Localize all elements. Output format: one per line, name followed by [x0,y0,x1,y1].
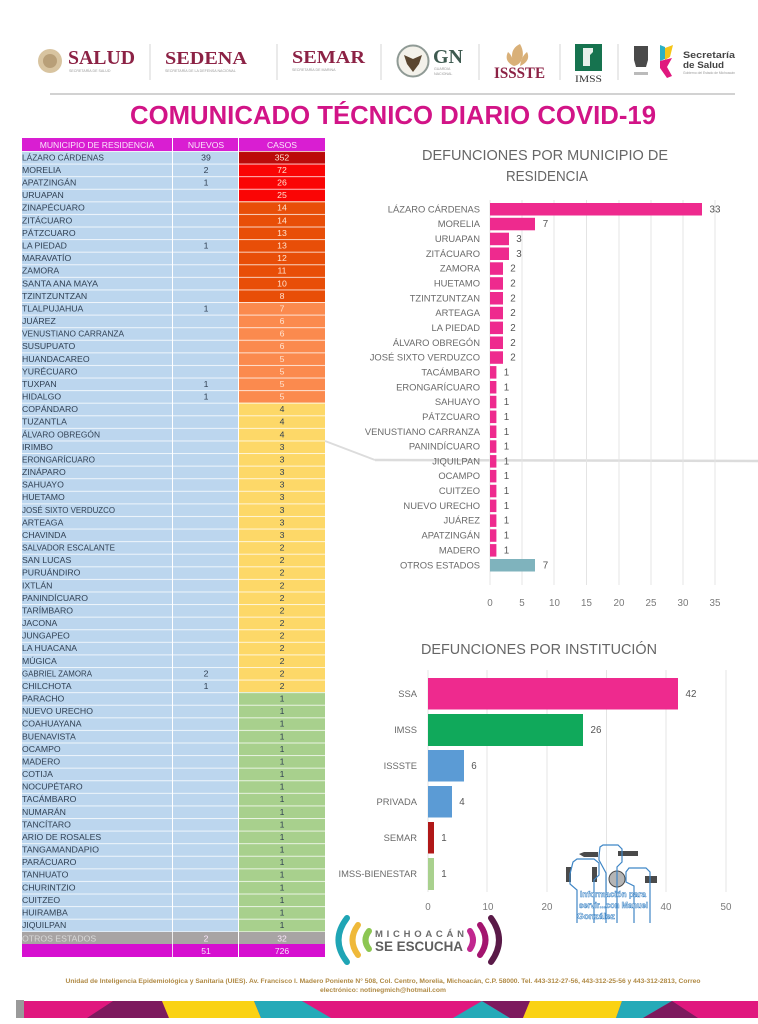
x axis ticks [487,598,721,609]
column: total cases: 3 [280,505,285,515]
value labels: 2 [510,308,516,319]
watermark: raised fists with pencil, phone and microphone [566,845,657,923]
column: municipality names: BUENAVISTA [22,731,76,741]
logo: Semar: SECRETARÍA DE MARINA [292,68,336,72]
logo: IMSS: IMSS [575,75,602,85]
header: institutional logos [38,44,736,85]
column: municipality names: SAHUAYO [22,480,64,490]
column: municipality names: NUMARÁN [22,807,66,817]
category labels: ISSSTE [384,760,417,771]
category labels: URUAPAN [435,233,480,244]
column: municipality names: TLALPUJAHUA [22,303,84,313]
value labels: 26 [591,725,602,736]
category labels: ARTEAGA [435,307,481,318]
column: total cases: 5 [280,392,285,402]
category labels: ERONGARÍCUARO [396,381,480,392]
column: total cases: 4 [280,429,285,439]
logo: Guardia Nacional: GN [433,46,464,68]
column: new cases: 39 [201,152,211,162]
bar chart: deaths by institution [339,670,732,913]
category labels: TZINTZUNTZAN [410,292,480,303]
column: municipality names: MORELIA [22,165,61,175]
column: new cases: 2 [204,934,209,944]
column: total cases: 1 [280,694,285,704]
column: municipality names: TACÁMBARO [22,794,77,804]
column: total cases: 1 [280,819,285,829]
column: total cases: 1 [280,845,285,855]
column: total cases: 5 [280,366,285,376]
column: total cases: 2 [280,580,285,590]
column: new cases [201,152,211,956]
x axis ticks [425,902,732,913]
value labels: 1 [504,545,509,556]
column: new cases: 1 [204,303,209,313]
column: municipality names: JIQUILPAN [22,920,66,930]
column: total cases: 6 [280,316,285,326]
column: total cases: 1 [280,756,285,766]
category labels: OCAMPO [438,470,480,481]
column: total cases: 2 [280,656,285,666]
value labels: 1 [504,427,509,438]
category labels: IMSS [394,724,417,735]
x axis ticks: 25 [646,598,657,609]
column: municipality names: LÁZARO CÁRDENAS [22,152,104,162]
column: total cases: 2 [280,542,285,552]
column: total cases: 13 [277,228,287,238]
footer decorative stripe [16,1000,758,1018]
column: municipality names: JACONA [22,618,57,628]
x axis ticks: 20 [542,902,553,913]
column: total cases: 2 [280,681,285,691]
table cell backgrounds [22,138,325,957]
category labels: PRIVADA [377,796,418,807]
column: total cases: 12 [277,253,287,263]
logo: Sedena: SEDENA [165,48,247,68]
value labels: 3 [516,234,522,245]
column: total cases: 1 [280,769,285,779]
column: municipality names: ZINÁPARO [22,467,66,477]
category labels [365,203,481,570]
logo: Michoacán se escucha: MICHOACÁN [375,929,464,940]
column: new cases: 1 [204,240,209,250]
table header: CASOS [267,140,297,150]
column: municipality names: ERONGARÍCUARO [22,454,95,464]
category labels: PÁTZCUARO [422,411,480,422]
column: municipality names: ÁLVARO OBREGÓN [22,429,100,439]
logo: Secretaría de Salud Michoacán: Secretaría [683,50,736,61]
value labels: 2 [510,278,516,290]
column: total cases: 3 [280,517,285,527]
logo: Michoacán se escucha [338,918,499,962]
x axis ticks: 0 [425,902,431,913]
column: new cases: 1 [204,379,209,389]
value labels [504,204,721,571]
logo: Guardia Nacional: GUARDIA [434,67,451,71]
column: total cases: 1 [280,719,285,729]
column: municipality names: GABRIEL ZAMORA [22,668,92,678]
category labels [339,688,418,879]
watermark: raised fists with pencil, phone and microphone: Información para [580,890,647,899]
column: municipality names: TANGAMANDAPIO [22,845,99,855]
column: total cases: 1 [280,744,285,754]
logo: Salud: SECRETARÍA DE SALUD [69,69,111,73]
column: total cases: 3 [280,454,285,464]
column: total cases: 5 [280,354,285,364]
column: total cases: 5 [280,379,285,389]
column: total cases: 2 [280,631,285,641]
column: municipality names: VENUSTIANO CARRANZA [22,329,124,339]
footer contact text: Unidad de Inteligencia Epidemiológica y Sanitaria (UIES). Av. Francisco I. Madero Poniente N° 508, Col. Centro, Morelia, Michoacán, C.P. 58000. Tel. 443-312-27-56, 443-312-25-56 y 443-312-2813, Correo [66,978,701,985]
column: total cases: 32 [277,934,287,944]
column: total cases: 2 [280,555,285,565]
column: municipality names: NUEVO URECHO [22,706,93,716]
column: municipality names: PANINDÍCUARO [22,593,88,603]
column: total cases: 1 [280,882,285,892]
column: municipality names: MADERO [22,756,60,766]
column: total cases: 7 [280,303,285,313]
column: municipality names: LA PIEDAD [22,240,67,250]
x axis ticks: 50 [721,902,732,913]
value labels: 1 [504,412,509,423]
value labels: 1 [504,382,509,393]
value labels: 1 [441,833,447,844]
bar chart: deaths by municipality [365,200,721,609]
column: municipality names: CUITZEO [22,895,60,905]
logo: Sedena [165,48,247,73]
value labels: 1 [504,486,509,497]
column: municipality names: IRIMBO [22,442,53,452]
column: total cases: 3 [280,480,285,490]
column: total cases: 4 [280,417,285,427]
watermark: raised fists with pencil, phone and microphone: González [577,912,615,921]
column: total cases: 2 [280,568,285,578]
category labels: VENUSTIANO CARRANZA [365,426,481,437]
category labels: HUETAMO [434,278,480,288]
column: total cases: 1 [280,908,285,918]
logo: Salud: SALUD [68,48,135,69]
column: total cases: 1 [280,782,285,792]
x axis ticks: 15 [581,598,592,609]
chart heading: deaths by municipality: DEFUNCIONES POR MUNICIPIO DE [422,148,668,164]
column: total cases: 1 [280,920,285,930]
column: total cases: 2 [280,618,285,628]
logo: Semar [292,47,365,72]
category labels: PANINDÍCUARO [409,441,480,452]
column: municipality names: MÚGICA [22,656,57,666]
chart heading: deaths by institution: DEFUNCIONES POR INSTITUCIÓN [421,641,657,658]
column: total cases: 1 [280,807,285,817]
column: new cases: 1 [204,681,209,691]
column: total cases: 4 [280,404,285,414]
column: municipality names: APATZINGÁN [22,178,76,188]
value labels: 2 [510,264,516,275]
column: new cases: 2 [204,668,209,678]
column: municipality names: SANTA ANA MAYA [22,278,98,288]
category labels: MADERO [439,544,480,555]
column: municipality names: HUIRAMBA [22,908,68,918]
value labels: 1 [504,456,509,467]
column: municipality names: ZITÁCUARO [22,215,72,225]
logo: Michoacán se escucha: SE ESCUCHA [375,938,463,954]
column: municipality names: PARACHO [22,694,65,704]
column: total cases: 1 [280,832,285,842]
x axis ticks: 5 [519,598,525,609]
column: total cases: 11 [277,266,287,276]
column: total cases: 2 [280,668,285,678]
value labels: 1 [504,442,509,453]
column: total cases: 25 [277,190,287,200]
value labels: 1 [504,531,509,542]
column: total cases: 72 [277,165,287,175]
value labels: 33 [710,204,721,215]
watermark: raised fists with pencil, phone and microphone: servir...con Manuel [579,901,648,910]
column: total cases: 10 [277,278,287,288]
column: total cases: 1 [280,870,285,880]
column: municipality names [22,152,124,943]
column: municipality names: ARIO DE ROSALES [22,832,101,842]
category labels: JOSÉ SIXTO VERDUZCO [370,352,480,363]
column: total cases: 13 [277,240,287,250]
category labels: JUÁREZ [444,515,480,526]
column: total cases: 352 [275,152,289,162]
category labels: APATZINGÁN [421,530,480,541]
value labels: 2 [510,338,516,349]
logo: ISSSTE: ISSSTE [494,65,545,82]
column: total cases: 2 [280,606,285,616]
column: municipality names: COTIJA [22,769,53,779]
column: total cases: 26 [277,178,287,188]
footer contact text: electrónico: notinegmich@hotmail.com [320,987,447,994]
column: municipality names: ZINAPÉCUARO [22,203,85,213]
column: municipality names: LA HUACANA [22,643,77,653]
column: new cases: 1 [204,392,209,402]
bars [490,203,702,572]
column: municipality names: JUÁREZ [22,316,56,326]
value labels [441,689,696,880]
column: total cases: 1 [280,857,285,867]
category labels: JIQUILPAN [432,455,480,466]
column: municipality names: TUXPAN [22,379,57,389]
column: total cases: 1 [280,794,285,804]
column: municipality names: SUSUPUATO [22,341,76,351]
bars [428,678,678,890]
value labels: 1 [504,367,509,378]
column: municipality names: CHILCHOTA [22,681,72,691]
column: municipality names: TANCÍTARO [22,819,71,829]
category labels: IMSS-BIENESTAR [339,868,417,879]
logo: Sedena: SECRETARÍA DE LA DEFENSA NACIONAL [165,69,236,73]
category labels: LÁZARO CÁRDENAS [388,203,480,214]
value labels: 7 [543,219,548,230]
logo: IMSS [575,44,602,85]
value labels: 6 [471,761,477,772]
column: municipality names: JOSÉ SIXTO VERDUZCO [22,505,115,515]
category labels: LA PIEDAD [432,322,480,333]
column: total cases: 14 [277,215,287,225]
column: municipality names: YURÉCUARO [22,366,78,376]
logo: ISSSTE [494,44,545,82]
footer contact text [66,978,701,994]
category labels: MORELIA [438,218,481,229]
x axis ticks: 10 [549,598,560,609]
logo: Secretaría de Salud Michoacán: de Salud [683,60,724,71]
logo: Guardia Nacional: NACIONAL [434,72,452,76]
value labels: 1 [504,397,509,408]
column: municipality names: PARÁCUARO [22,857,77,867]
category labels: SSA [398,688,418,699]
column: municipality names: OTROS ESTADOS [22,934,96,944]
logo: Guardia Nacional [398,46,464,76]
value labels: 1 [441,869,447,880]
column: total cases: 3 [280,492,285,502]
value labels: 1 [504,501,509,512]
column: total cases: 3 [280,442,285,452]
value labels: 7 [543,560,548,571]
logo: Secretaría de Salud Michoacán [660,45,736,78]
chart heading: deaths by municipality [422,148,668,185]
category labels: TACÁMBARO [421,366,480,377]
column: total cases: 6 [280,341,285,351]
table header [22,138,325,151]
column: municipality names: COAHUAYANA [22,719,82,729]
table header: MUNICIPIO DE RESIDENCIA [40,140,155,150]
column: municipality names: HIDALGO [22,392,61,402]
column: municipality names: TANHUATO [22,870,69,880]
value labels: 2 [510,323,516,334]
column: municipality names: OCAMPO [22,744,61,754]
column: municipality names: ARTEAGA [22,517,64,527]
column: municipality names: NOCUPÉTARO [22,782,83,792]
title: COMUNICADO TÉCNICO DIARIO COVID-19 [130,100,656,130]
x axis ticks: 20 [614,598,625,609]
x axis ticks: 40 [661,902,672,913]
column: total cases: 14 [277,203,287,213]
column: total cases [275,152,289,956]
column: total cases: 8 [280,291,285,301]
column: municipality names: SALVADOR ESCALANTE [22,542,115,552]
category labels: ZAMORA [440,263,481,274]
column: municipality names: HUETAMO [22,492,65,502]
column: total cases: 6 [280,329,285,339]
column: total cases: 3 [280,530,285,540]
chart heading: deaths by municipality: RESIDENCIA [506,169,588,185]
value labels: 1 [504,516,509,527]
table: cases by municipality [22,138,325,957]
column: municipality names: TZINTZUNTZAN [22,291,87,301]
column: total cases: 1 [280,706,285,716]
column: total cases: 1 [280,731,285,741]
x axis ticks: 0 [487,598,493,609]
logo: Salud [38,48,135,73]
value labels: 1 [504,471,509,482]
value labels: 42 [686,689,696,700]
column: total cases: 3 [280,467,285,477]
column: municipality names: CHAVINDA [22,530,66,540]
column: municipality names: PÁTZCUARO [22,228,76,238]
logo: Secretaría de Salud Michoacán: Gobierno del Estado de Michoacán [683,71,735,75]
category labels: SAHUAYO [435,396,480,407]
column: municipality names: PURUÁNDIRO [22,568,81,578]
column: municipality names: HUANDACAREO [22,354,90,364]
category labels: ÁLVARO OBREGÓN [393,337,480,348]
category labels: CUITZEO [439,485,480,496]
value labels: 4 [459,797,465,808]
column: municipality names: COPÁNDARO [22,404,78,414]
logo: Michoacán shield [634,46,648,75]
column: municipality names: SAN LUCAS [22,555,71,565]
x axis ticks: 10 [483,902,494,913]
column: new cases: 2 [204,165,209,175]
column: total cases: 2 [280,643,285,653]
column: total cases: 726 [275,946,289,956]
column: municipality names: MARAVATÍO [22,253,71,263]
category labels: ZITÁCUARO [426,248,480,259]
table header: NUEVOS [188,140,224,150]
value labels: 2 [510,293,516,304]
column: municipality names: URUAPAN [22,190,64,200]
category labels: OTROS ESTADOS [400,559,480,570]
column: new cases: 1 [204,178,209,188]
value labels: 2 [510,353,516,364]
column: municipality names: TUZANTLA [22,417,67,427]
logo: Semar: SEMAR [292,47,365,67]
category labels: NUEVO URECHO [403,500,480,511]
column: municipality names: IXTLÁN [22,580,52,590]
column: municipality names: JUNGAPEO [22,631,70,641]
column: total cases: 1 [280,895,285,905]
column: municipality names: TARÍMBARO [22,606,73,616]
x axis ticks: 35 [710,598,721,609]
category labels: SEMAR [384,832,417,843]
column: municipality names: ZAMORA [22,266,59,276]
value labels: 3 [516,249,522,260]
column: municipality names: CHURINTZIO [22,882,76,892]
column: new cases: 51 [201,946,211,956]
x axis ticks: 30 [678,598,689,609]
column: total cases: 2 [280,593,285,603]
